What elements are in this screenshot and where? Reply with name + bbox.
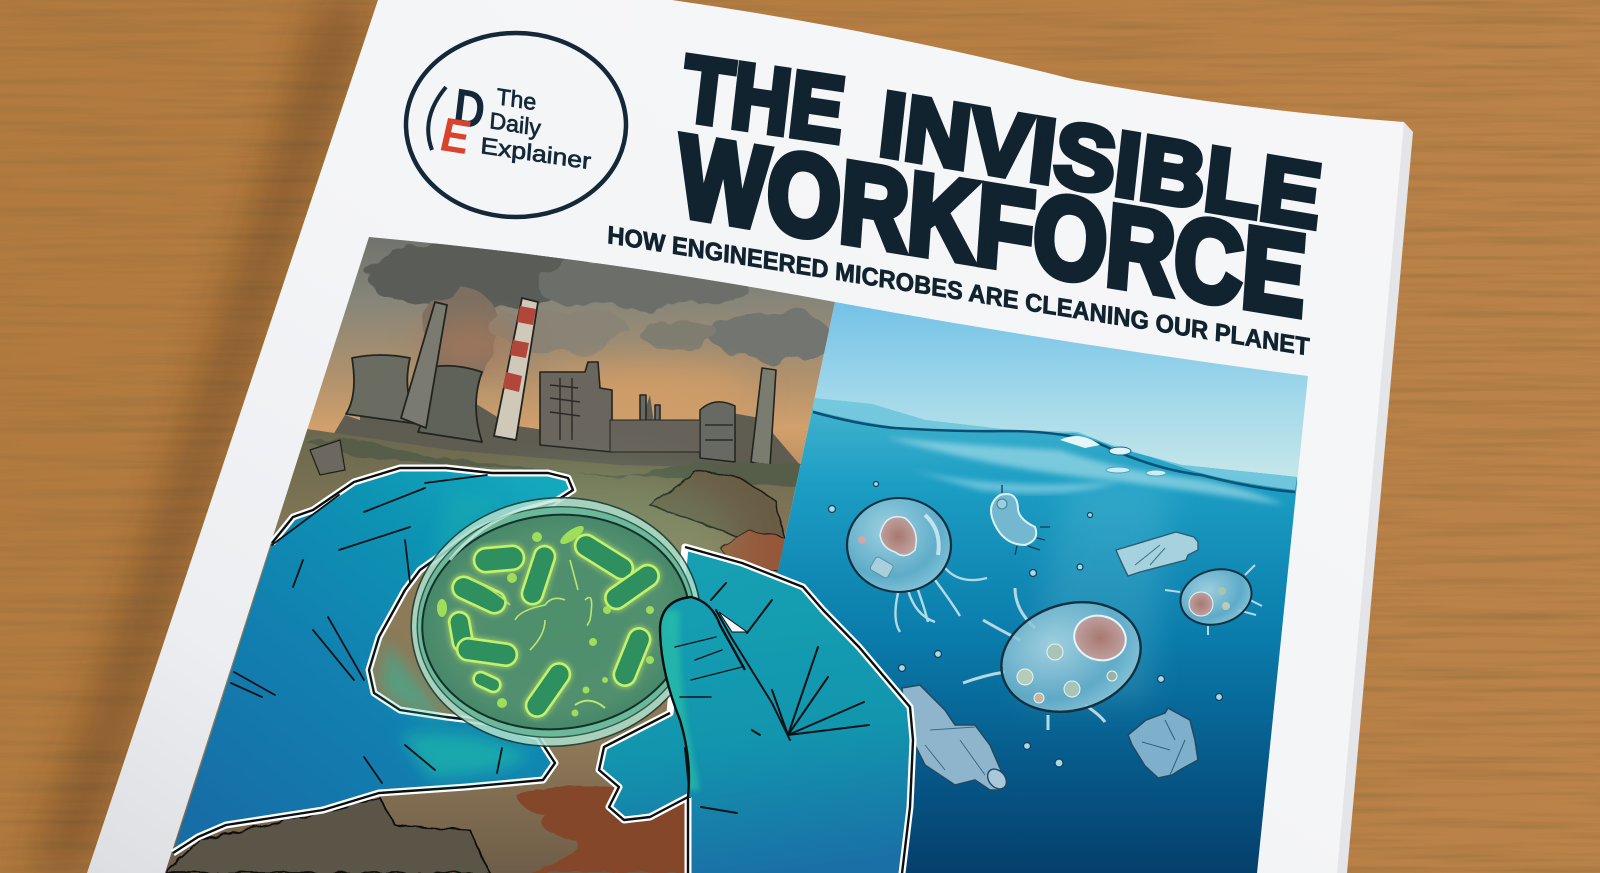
microbe A <box>847 498 987 632</box>
panel: polluted industrial landscape <box>150 220 850 873</box>
title: THE INVISIBLE WORKFORCE: THE <box>678 36 849 163</box>
bubbles <box>828 482 1222 767</box>
dish rim highlight <box>450 500 560 560</box>
logo wordmark: The <box>496 83 537 115</box>
flagella and specks <box>437 523 654 716</box>
barren ground <box>150 425 830 873</box>
sky with smoke <box>291 237 835 480</box>
logo ring <box>406 33 626 217</box>
water body <box>778 398 1298 873</box>
logo bracket <box>428 87 446 150</box>
subtitle: HOW ENGINEERED MICROBES ARE CLEANING OUR PLANET <box>607 222 1310 362</box>
logo letter D: D <box>451 79 488 141</box>
left hand creases <box>231 475 502 783</box>
rock foreground <box>165 798 490 873</box>
panel: ocean with microbes <box>778 302 1308 873</box>
surface waves <box>813 398 1297 505</box>
microbe B kidney <box>991 485 1050 555</box>
illustration: right hand finger in front of dish <box>658 597 760 800</box>
crumpled plastic <box>1128 708 1198 778</box>
title: THE INVISIBLE WORKFORCE: WORKFORCE <box>674 112 1310 341</box>
bacteria <box>448 531 663 721</box>
sun rays <box>1020 480 1170 700</box>
illustration: right gloved hand, back <box>599 547 913 873</box>
microbe C large <box>963 586 1154 730</box>
logo wordmark <box>480 83 592 175</box>
logo wordmark: Daily <box>489 107 542 141</box>
logo wordmark: Explainer <box>480 133 592 175</box>
paper gap between fingers <box>719 612 747 632</box>
illustration: petri dish with bacteria <box>399 484 713 760</box>
illustration: left gloved hand <box>173 468 573 853</box>
plastic bottle lower <box>902 685 1010 793</box>
sky <box>793 302 1308 500</box>
logo: The Daily Explainer <box>406 33 626 217</box>
title: THE INVISIBLE WORKFORCE: INVISIBLE <box>875 74 1326 248</box>
factory skyline <box>334 297 798 466</box>
microbe D small <box>1165 562 1262 635</box>
logo letter E: E <box>439 107 472 165</box>
rust puddle <box>516 786 700 873</box>
plastic bottle upper <box>1116 532 1198 576</box>
right hand creases <box>685 583 869 813</box>
